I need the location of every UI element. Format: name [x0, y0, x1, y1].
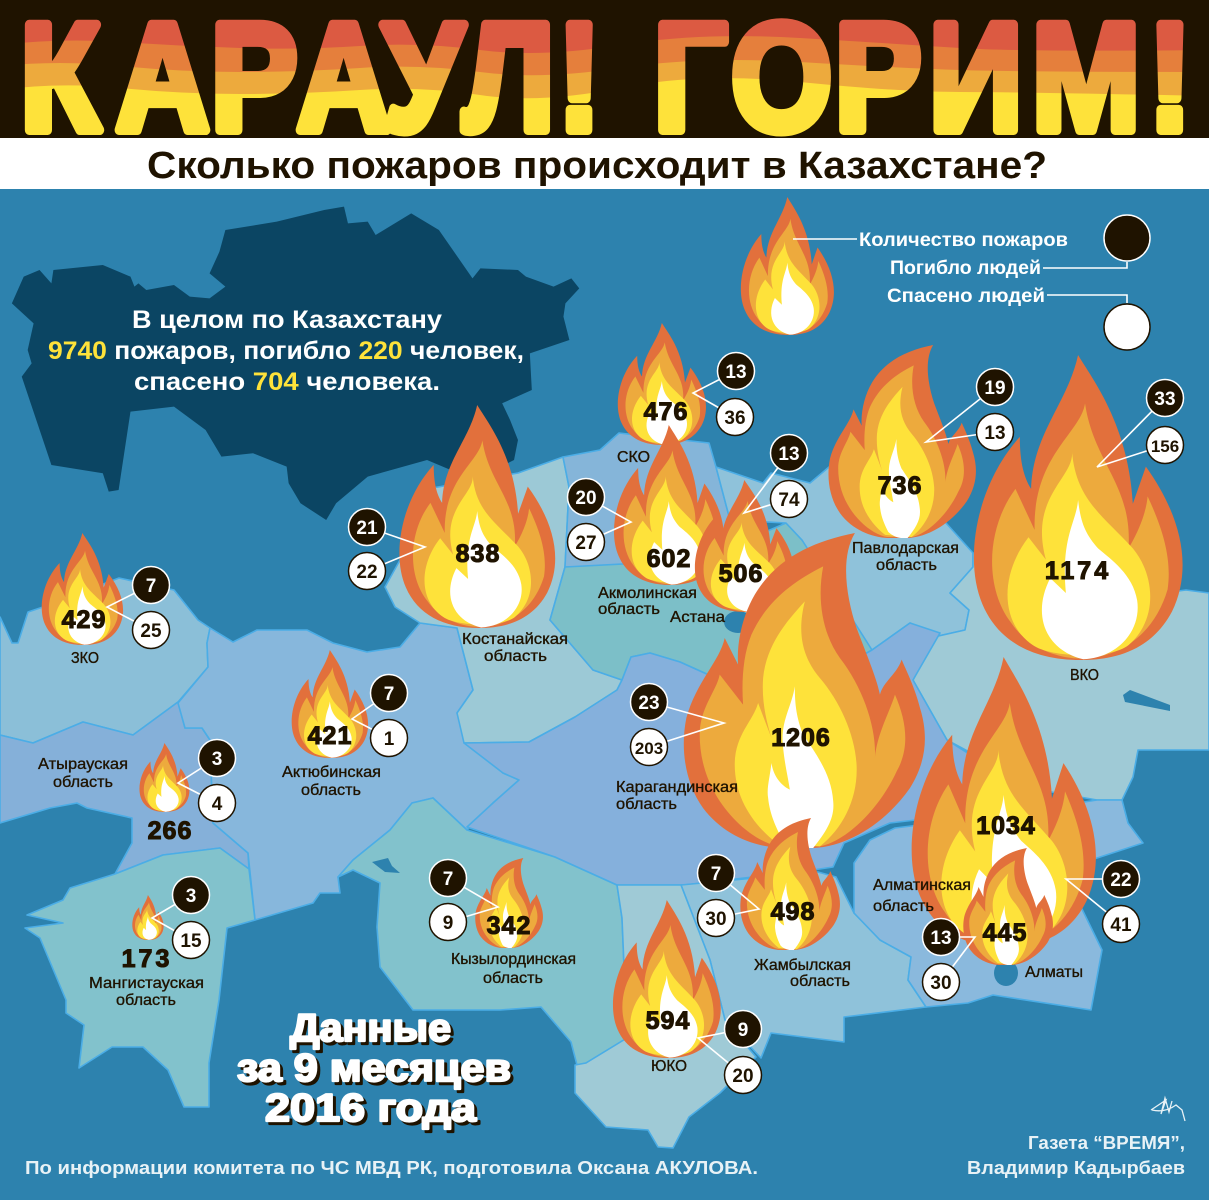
region labels — [38, 449, 1099, 1075]
panel: total text: 9740 пожаров, погибло 220 человек, — [48, 337, 524, 365]
legend circle: dead — [1104, 215, 1150, 261]
region: ЮКО — [575, 885, 756, 1148]
fire: Атырауская: 4 — [212, 794, 223, 815]
panel: total text — [48, 306, 524, 396]
fire: ЗКО: 25 — [140, 621, 162, 642]
fire: Мангистауская: 15 — [180, 931, 202, 952]
panel: total text: В целом по Казахстану — [132, 306, 442, 334]
fire: Костанайская: 838 — [456, 540, 500, 568]
region: Костанайская — [385, 457, 622, 743]
region: Карагандинская — [464, 623, 1010, 885]
fire: Атырауская: 266 — [148, 817, 192, 845]
subtitle: Сколько пожаров происходит в Казахстане? — [147, 145, 1047, 187]
label: Карагандинская область: область — [616, 796, 677, 813]
subtitle band — [0, 138, 1209, 189]
label: Павлодарская область: Павлодарская — [852, 540, 959, 557]
fire: Акмолинская: 602 — [647, 545, 691, 573]
fire: Алматинская: 1034 — [976, 812, 1036, 840]
fire: Жамбылская — [698, 818, 840, 950]
label: Атырауская область: область — [53, 774, 113, 791]
fire: Жамбылская: 30 — [705, 909, 727, 930]
fire: СКО: 476 — [644, 398, 688, 426]
fire: Акмолинская: 27 — [575, 533, 597, 554]
fire: Кызылординская: 342 — [487, 912, 531, 940]
fire: ЮКО — [613, 900, 762, 1094]
fire: Алматы: 13 — [930, 928, 952, 949]
fire: Актюбинская: 421 — [308, 722, 352, 750]
title: КАРАУЛ! ГОРИМ! — [24, 18, 1184, 136]
fire: Павлодарская: 736 — [878, 472, 922, 500]
fire: Мангистауская — [122, 876, 210, 973]
lake: Астана — [724, 611, 752, 633]
label: Кызылординская область: Кызылординская — [451, 951, 576, 968]
period note with shadow: за 9 месяцев — [237, 1047, 511, 1090]
fire: ЗКО: 429 — [62, 606, 106, 634]
label: Жамбылская область — [754, 957, 851, 990]
label: ЗКО: ЗКО — [71, 650, 99, 667]
period note with shadow: за 9 месяцев — [240, 1050, 514, 1093]
fire: Атырауская: 3 — [212, 749, 222, 770]
label: Атырауская область: Атырауская — [38, 756, 128, 773]
fire: Алматы: 445 — [983, 919, 1027, 947]
fire: Мангистауская: 173 — [122, 945, 172, 973]
region: Кызылординская — [338, 798, 627, 1065]
fire: Акмолинская: 20 — [575, 488, 597, 509]
fire: Актюбинская: 7 — [384, 684, 394, 705]
label: СКО: СКО — [617, 449, 650, 466]
title band — [0, 0, 1209, 138]
lake: Алаколь — [1123, 690, 1170, 711]
fire: Кызылординская — [430, 858, 543, 948]
fire: Алматы: 30 — [930, 973, 952, 994]
panel: total text: спасено 704 человека. — [134, 368, 440, 396]
label: Карагандинская область — [616, 779, 738, 813]
region: Жамбылская — [681, 872, 926, 1058]
author signature — [1151, 1098, 1185, 1121]
label: Актюбинская область: Актюбинская — [282, 764, 381, 781]
fire: Павлодарская: 19 — [984, 378, 1006, 399]
fire: ВКО: 1174 — [1045, 557, 1111, 585]
label: Кызылординская область: область — [483, 970, 543, 987]
legend labels: Количество пожаров — [859, 230, 1068, 251]
period note with shadow: 2016 года — [268, 1090, 479, 1133]
fire: Астана: 506 — [719, 560, 763, 588]
fire: Астана: 74 — [778, 490, 800, 511]
region: ЗКО — [0, 578, 210, 743]
fire: Костанайская — [348, 405, 555, 628]
credits: Газета “ВРЕМЯ”, — [1028, 1133, 1185, 1153]
fire: Жамбылская: 498 — [771, 898, 815, 926]
legend lines — [793, 239, 1127, 303]
period note with shadow — [237, 1007, 514, 1133]
fire: ВКО — [974, 355, 1184, 660]
fire: Актюбинская: 1 — [384, 729, 395, 750]
label: Павлодарская область: область — [876, 557, 937, 574]
fire: Кызылординская: 9 — [443, 913, 453, 934]
label: Алматы: Алматы — [1025, 964, 1083, 981]
fire: СКО: 36 — [724, 408, 746, 429]
label: Костанайская область: область — [484, 648, 547, 665]
fire: ВКО: 156 — [1151, 437, 1179, 456]
label: Жамбылская область: область — [790, 973, 850, 990]
label: ВКО: ВКО — [1070, 667, 1099, 684]
period note with shadow: Данные — [293, 1010, 454, 1053]
label: Мангистауская область: область — [116, 992, 176, 1009]
fire: Павлодарская: 13 — [984, 423, 1006, 444]
fire: СКО: 13 — [725, 362, 747, 383]
fire: Акмолинская — [568, 425, 724, 585]
label: Жамбылская область: Жамбылская — [754, 957, 851, 974]
region: Алматинская — [854, 800, 1143, 1010]
fire: Карагандинская: 1206 — [771, 724, 831, 752]
label: Актюбинская область: область — [301, 782, 361, 799]
period note with shadow: 2016 года — [265, 1087, 476, 1130]
label: Акмолинская область — [598, 585, 697, 618]
fire: ЗКО — [42, 533, 170, 648]
period note with shadow: Данные — [290, 1007, 451, 1050]
fire: Кызылординская: 7 — [443, 869, 453, 890]
label: Алматинская область: Алматинская — [873, 877, 971, 894]
fire: СКО — [618, 323, 754, 445]
region: Атырауская — [0, 702, 249, 874]
region: СКО — [563, 433, 730, 567]
label: Мангистауская область: Мангистауская — [89, 975, 204, 992]
fire: Карагандинская — [630, 533, 925, 848]
fire: Карагандинская: 203 — [635, 739, 663, 758]
label: Павлодарская область — [852, 540, 959, 574]
label: Мангистауская область — [89, 975, 204, 1009]
legend flame — [741, 197, 834, 335]
credits — [967, 1133, 1185, 1178]
legend labels: Спасено людей — [887, 286, 1045, 307]
fire: Карагандинская: 23 — [638, 693, 660, 714]
label: Атырауская область — [38, 756, 128, 791]
fire: Актюбинская — [292, 650, 408, 758]
fire: ЮКО: 20 — [732, 1066, 754, 1087]
region: Мангистауская — [25, 848, 255, 1107]
label: Астана: Астана — [670, 609, 725, 626]
region: Актюбинская — [178, 623, 519, 920]
fire: Атырауская — [139, 740, 236, 845]
label: ЮКО: ЮКО — [651, 1058, 687, 1075]
lake: Арал — [372, 858, 400, 873]
fire: Костанайская: 22 — [356, 562, 378, 583]
label: Акмолинская область: Акмолинская — [598, 585, 697, 602]
fire: ВКО: 33 — [1154, 389, 1176, 410]
label: Акмолинская область: область — [598, 601, 660, 618]
label: Кызылординская область — [451, 951, 576, 987]
label: Актюбинская область — [282, 764, 381, 799]
label: Костанайская область — [462, 631, 568, 665]
dark map silhouette of Kazakhstan — [12, 207, 579, 520]
label: Алматинская область — [873, 877, 971, 915]
fire: Мангистауская: 3 — [186, 886, 196, 907]
fire: ЗКО: 7 — [146, 576, 156, 597]
legend — [741, 197, 1150, 350]
fire: Алматинская: 41 — [1110, 915, 1132, 936]
fire: Алматинская — [912, 657, 1140, 947]
region: Павлодарская — [716, 467, 973, 650]
legend labels — [859, 230, 1068, 307]
source text: По информации комитета по ЧС МВД РК, подготовила Оксана АКУЛОВА. — [25, 1158, 758, 1178]
fire: Астана — [695, 434, 808, 612]
label: Костанайская область: Костанайская — [462, 631, 568, 648]
fire: Алматы — [922, 848, 1053, 1000]
region: ВКО — [913, 553, 1209, 800]
fire: Алматинская: 22 — [1110, 870, 1132, 891]
lake: Капшагай — [994, 960, 1018, 986]
legend labels: Погибло людей — [890, 258, 1041, 279]
fire: ЮКО: 594 — [646, 1007, 690, 1035]
fire: Павлодарская — [828, 345, 1014, 538]
region: Акмолинская — [550, 523, 872, 690]
legend circle: rescued — [1104, 304, 1150, 350]
label: Алматинская область: область — [873, 898, 934, 915]
credits: Владимир Кадырбаев — [967, 1158, 1185, 1178]
fire: Астана: 13 — [778, 444, 800, 465]
fire: Жамбылская: 7 — [711, 864, 721, 885]
fire: ЮКО: 9 — [738, 1020, 748, 1041]
fire: Костанайская: 21 — [356, 518, 378, 539]
label: Карагандинская область: Карагандинская — [616, 779, 738, 796]
map of regions — [0, 433, 1209, 1148]
